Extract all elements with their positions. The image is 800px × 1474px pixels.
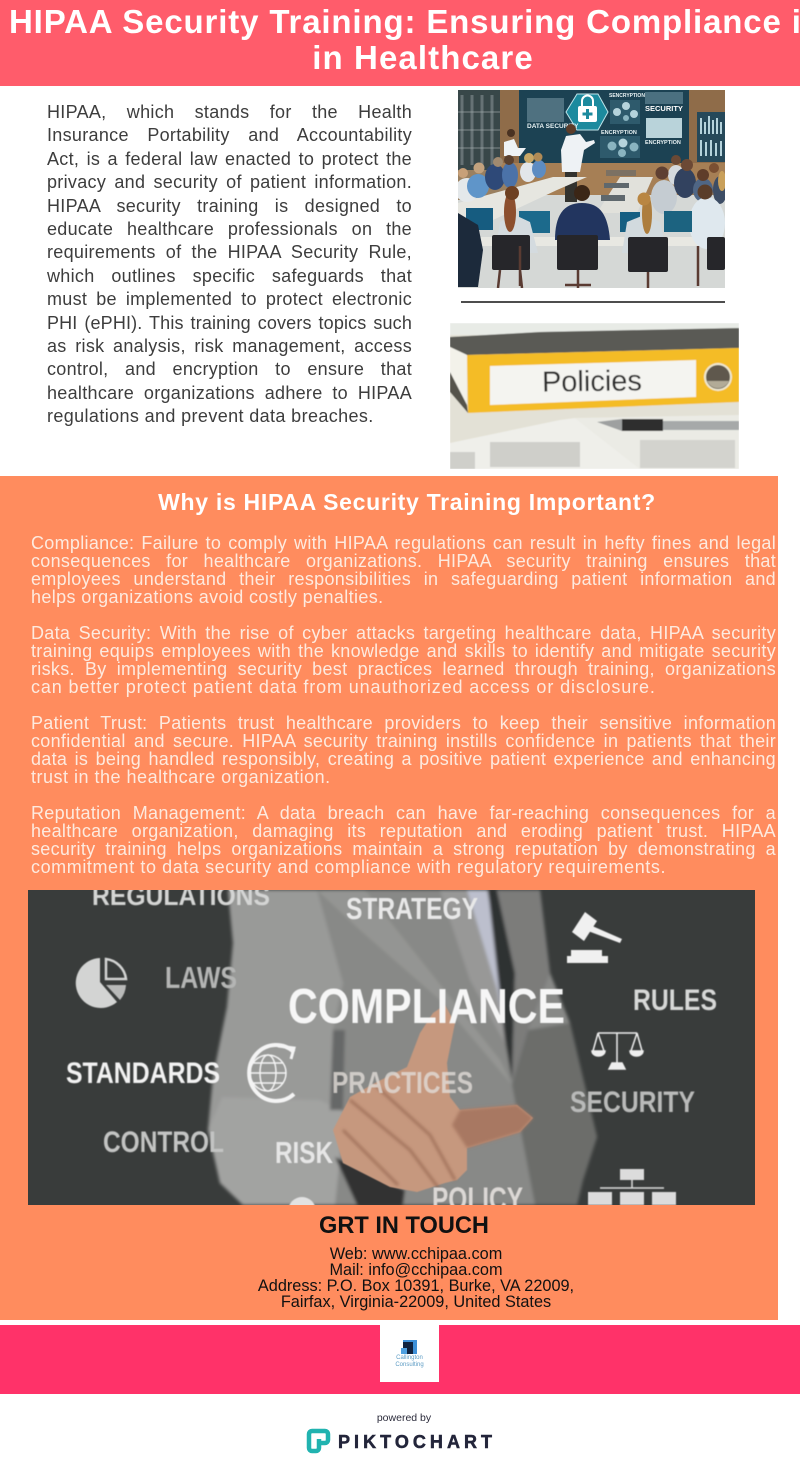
title xyxy=(9,3,800,76)
icon: globe with arrows xyxy=(249,1045,294,1101)
logo wordmark: Consulting xyxy=(395,1362,424,1368)
paragraph: data security xyxy=(31,623,776,697)
photo: hipaa training classroom: DATA SECURITY xyxy=(527,123,579,130)
concept words: RULES xyxy=(633,984,717,1017)
intro text block: Insurance Portability and Accountability xyxy=(47,125,412,145)
intro text block: as risk analysis, risk management, access xyxy=(47,336,412,356)
paragraph: data security: risks. By implementing security best practices learned through training, organizations xyxy=(31,659,776,679)
logo: Callington Consulting xyxy=(380,1325,439,1382)
intro text block: HIPAA security training is designed to xyxy=(47,196,412,216)
header banner xyxy=(0,0,800,86)
title: in Healthcare xyxy=(312,39,534,76)
pointing hand xyxy=(333,1005,533,1192)
paragraph: data security: can better protect patient data from unauthorized access or disclosure. xyxy=(31,677,656,697)
paragraph: patient trust: data is being handled responsibly, creating a positive patient experience and enhancing xyxy=(31,749,776,769)
logo wordmark: Callington xyxy=(396,1355,423,1361)
intro text block xyxy=(47,102,412,426)
logo wordmark xyxy=(395,1354,424,1368)
concept words: LAWS xyxy=(165,960,237,995)
intro text block: which outlines specific safeguards that xyxy=(47,266,412,286)
paragraph: reputation management xyxy=(31,803,776,877)
footer band xyxy=(0,1325,800,1394)
conference tables xyxy=(458,177,587,230)
contact heading: GRT IN TOUCH xyxy=(319,1213,489,1239)
photo: hipaa training classroom xyxy=(458,90,725,288)
foreground attendees xyxy=(495,215,538,253)
contact details xyxy=(258,1245,574,1311)
intro text block: control, and encryption to ensure that xyxy=(47,359,412,379)
contact details: Web: www.cchipaa.com xyxy=(330,1245,502,1263)
paragraph: compliance: employees understand their responsibilities in safeguarding patient information and xyxy=(31,569,776,589)
photo: policies binder xyxy=(450,323,739,469)
concept words: RISK xyxy=(275,1135,333,1170)
concept words: CONTROL xyxy=(103,1126,224,1159)
intro text block: privacy and security of patient information. xyxy=(47,172,412,192)
paragraph: reputation management: commitment to data security and compliance with regulatory requirements. xyxy=(31,857,666,877)
businessman suit xyxy=(208,890,597,1205)
photo: hipaa training classroom: SECURITY xyxy=(645,104,683,113)
seated attendees right xyxy=(668,165,684,185)
icon: pie chart xyxy=(76,958,126,1008)
paragraph: patient trust: confidential and secure. HIPAA security training instills confidence in patients that their xyxy=(31,731,776,751)
piktochart logo xyxy=(306,1428,492,1454)
icon: org chart xyxy=(588,1169,676,1205)
intro text block: educate healthcare professionals on the xyxy=(47,219,412,239)
divider line xyxy=(461,301,725,303)
paragraph: compliance xyxy=(31,533,776,607)
intro text block: must be implemented to protect electronic xyxy=(47,289,412,309)
title: HIPAA Security Training: Ensuring Compliance in xyxy=(9,3,800,40)
photo: policies binder: Policies xyxy=(542,365,642,399)
floor xyxy=(458,195,725,288)
contact details: Fairfax, Virginia-22009, United States xyxy=(281,1293,551,1311)
wordmark: PIKTOCHART xyxy=(338,1432,492,1452)
intro text block: PHI (ePHI). This training covers topics such xyxy=(47,313,412,333)
paragraph: compliance: Compliance: Failure to comply with HIPAA regulations can result in hefty fines and legal xyxy=(31,533,776,553)
concept words: COMPLIANCE xyxy=(288,980,565,1034)
intro text block: requirements of the HIPAA Security Rule, xyxy=(47,242,412,262)
paragraph: patient trust xyxy=(31,713,776,787)
chairs xyxy=(492,235,530,270)
paragraph: compliance: helps organizations avoid costly penalties. xyxy=(31,587,384,607)
paragraph: patient trust: trust in the healthcare organization. xyxy=(31,767,331,787)
contact details: Address: P.O. Box 10391, Burke, VA 22009, xyxy=(258,1277,574,1295)
intro text block: healthcare organizations adhere to HIPAA xyxy=(47,383,412,403)
concept words: PRACTICES xyxy=(332,1065,473,1100)
concept words: STRATEGY xyxy=(346,891,478,926)
concept words: SECURITY xyxy=(570,1086,695,1119)
paragraph: reputation management: Reputation Management: A data breach can have far-reaching consequences for a xyxy=(31,803,776,823)
doctor presenter xyxy=(561,124,595,202)
paragraph: compliance: consequences for healthcare organizations. HIPAA security training ensures that xyxy=(31,551,776,571)
panel: why training is important xyxy=(0,476,778,1320)
photo: compliance concept with pointing businessman xyxy=(28,890,755,1205)
logo icon xyxy=(306,1428,330,1454)
logo mark xyxy=(401,1340,417,1354)
photo: hipaa training classroom: ENCRYPTION xyxy=(645,140,681,146)
icon: scales of justice xyxy=(592,1033,643,1069)
intro text block: Act, is a federal law enacted to protect the xyxy=(47,149,412,169)
paragraph: data security: training equips employees with the knowledge and skills to identify and mitigate security xyxy=(31,641,776,661)
intro text block: regulations and prevent data breaches. xyxy=(47,406,374,426)
photo: hipaa training classroom: SENCRYPTION xyxy=(609,93,645,99)
icon: gavel xyxy=(567,912,622,963)
foreground laptops xyxy=(466,208,493,230)
concept words xyxy=(66,881,717,1217)
intro text block: HIPAA, which stands for the Health xyxy=(47,102,412,122)
photo: hipaa training classroom: ENCRYPTION xyxy=(601,130,637,136)
heading: Why is HIPAA Security Training Important? xyxy=(158,489,656,515)
paragraph: reputation management: security training helps organizations maintain a strong reputation by demonstrating a xyxy=(31,839,776,859)
paragraph: data security: Data Security: With the rise of cyber attacks targeting healthcare data, HIPAA security xyxy=(31,623,776,643)
paragraph: patient trust: Patient Trust: Patients trust healthcare providers to keep their sensitive information xyxy=(31,713,776,733)
paragraph: reputation management: healthcare organization, damaging its reputation and eroding patient trust. HIPAA xyxy=(31,821,776,841)
concept words: STANDARDS xyxy=(66,1057,220,1090)
icon: gear xyxy=(288,1197,316,1225)
seated attendees left xyxy=(455,178,479,202)
powered by label: powered by xyxy=(377,1412,431,1424)
contact details: Mail: info@cchipaa.com xyxy=(329,1261,503,1279)
